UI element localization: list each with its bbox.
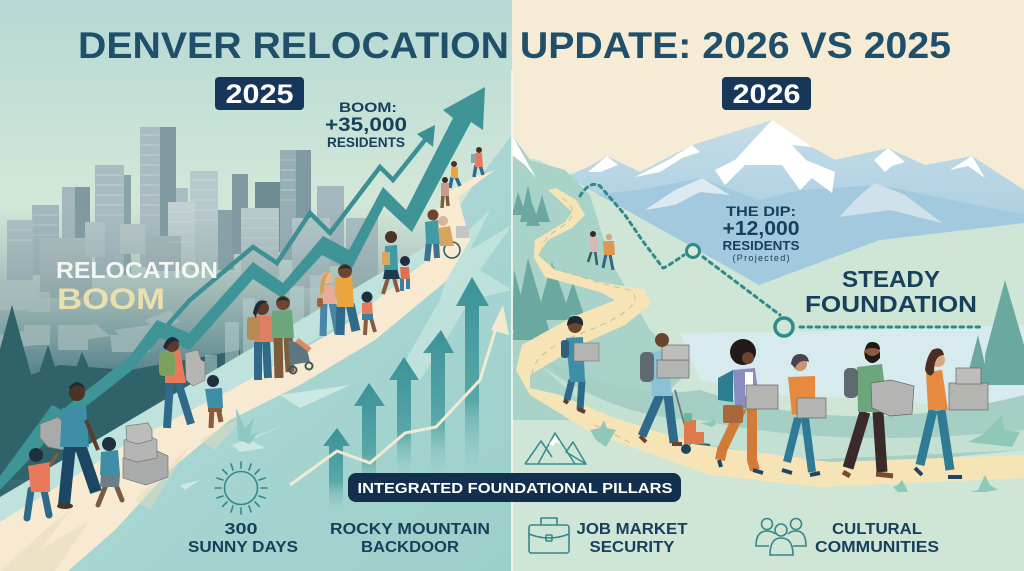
foreground pine trees — [0, 305, 240, 480]
year badge 2025: 2025 — [226, 79, 294, 109]
callout: the dip residents — [722, 203, 800, 263]
man in green — [272, 296, 294, 378]
orange child — [27, 448, 58, 518]
mountain slope — [0, 135, 512, 571]
headline: relocation boom: RELOCATION — [56, 257, 218, 283]
callout: the dip residents: RESIDENTS — [722, 238, 800, 253]
meadow in front of road — [540, 365, 1024, 460]
icon: small mountains — [525, 433, 586, 464]
stacked boxes — [185, 350, 205, 386]
family: blonde woman, man in orange, child — [317, 264, 375, 336]
callout: boom residents: BOOM: — [339, 99, 397, 115]
cream trend line — [290, 325, 497, 485]
woman with backpack — [382, 231, 400, 294]
year badge 2026 — [722, 77, 811, 110]
walker 6 woman in orange with boxes — [915, 348, 988, 477]
far hikers on hilltop — [441, 147, 483, 208]
callout: the dip residents: THE DIP: — [726, 203, 796, 219]
right background — [512, 0, 1024, 571]
man — [425, 210, 440, 261]
label: COMMUNITIES — [815, 539, 939, 556]
walker 1 with box — [561, 316, 599, 412]
lake — [680, 325, 1024, 420]
year badge 2025 — [215, 77, 304, 110]
man — [603, 234, 615, 270]
slope highlight shards — [180, 385, 350, 490]
cream arrow head — [491, 305, 509, 335]
valley meadow — [512, 155, 1024, 571]
walker 2 with hand truck — [640, 333, 710, 454]
label: CULTURAL — [832, 521, 922, 538]
hiker in pink — [441, 177, 449, 208]
callout: boom residents — [325, 99, 407, 150]
pillar: rocky mountain backdoor — [330, 521, 490, 556]
walker 3 in purple jacket — [718, 339, 778, 473]
label: SECURITY — [590, 539, 675, 556]
label: SUNNY DAYS — [188, 539, 298, 556]
callout: the dip residents: +12,000 — [722, 218, 800, 240]
pillar: 300 sunny days — [188, 462, 298, 556]
label — [576, 521, 688, 556]
right foreground pines — [965, 280, 1024, 385]
blue child — [98, 437, 122, 505]
big rising trend arrow — [0, 87, 485, 490]
man pushing wheelchair — [425, 210, 469, 261]
stacked boxes — [123, 423, 168, 485]
thin rising trend arrow — [132, 125, 435, 365]
child in red — [400, 256, 410, 291]
hiker with orange backpack — [471, 147, 483, 177]
woman with green backpack — [159, 337, 191, 428]
left background — [0, 0, 512, 571]
label — [188, 521, 298, 556]
rising vertical arrows — [323, 277, 489, 515]
slope facets — [400, 210, 512, 380]
translucent bar silhouettes — [205, 275, 324, 385]
woman in teal with child — [382, 231, 410, 294]
headline: steady foundation: FOUNDATION — [805, 291, 977, 317]
section banner: integrated foundational pillars — [348, 473, 681, 502]
road centre dashes — [532, 198, 635, 445]
foreground roofs — [0, 283, 180, 352]
stroller — [288, 340, 312, 374]
label: JOB MARKET — [576, 521, 688, 538]
father — [57, 382, 98, 509]
foreground grass tufts — [590, 415, 1020, 492]
child in red — [362, 292, 375, 335]
icon: sun — [215, 462, 267, 514]
walker 5 bearded man with large box — [843, 342, 914, 476]
snow caps — [588, 120, 985, 193]
winding road — [516, 188, 1024, 487]
man in orange shirt — [335, 264, 356, 335]
icon: community group — [756, 518, 806, 555]
couple with stroller — [247, 296, 312, 380]
panel: 2025 relocation boom — [0, 0, 512, 571]
callout: the dip residents: (Projected) — [732, 253, 790, 263]
family: woman with boxes and child — [159, 337, 223, 428]
teal strip beside path — [0, 244, 452, 525]
pillar: rocky mountain backdoor: BACKDOOR — [361, 539, 459, 556]
marker ring, dip — [686, 244, 700, 258]
marker ring, steady — [775, 318, 793, 336]
walker 4 with glasses — [782, 354, 826, 475]
year badge 2026: 2026 — [732, 79, 800, 109]
path shadows — [0, 415, 245, 571]
title: DENVER RELOCATION UPDATE: 2026 VS 2025 — [78, 25, 951, 66]
green foreground hills — [545, 360, 1024, 470]
centre divider — [511, 70, 513, 571]
moving boxes held by father — [40, 417, 64, 450]
far couple on the road — [588, 231, 615, 270]
city skyline — [0, 127, 430, 505]
pillar: cultural communities — [756, 518, 939, 556]
child in blue shirt — [205, 375, 223, 428]
wheelchair with passenger — [438, 216, 469, 258]
headline: relocation boom — [56, 257, 218, 316]
family: child, father, child, boxes — [27, 382, 168, 518]
small plant — [236, 408, 258, 444]
dotted trend line: the dip — [580, 184, 980, 327]
hiker in yellow — [450, 161, 460, 188]
icon: briefcase — [529, 518, 569, 553]
section banner: integrated foundational pillars: INTEGRATED FOUNDATIONAL PILLARS — [358, 480, 672, 497]
lower ridges — [645, 178, 730, 210]
callout: boom residents: +35,000 — [325, 115, 407, 136]
pillar: rocky mountain backdoor: ROCKY MOUNTAIN — [330, 521, 490, 538]
woman — [588, 231, 598, 265]
lower city and forest shading — [0, 205, 430, 505]
cream hillside path — [0, 170, 495, 571]
pillar: job market security — [529, 518, 688, 556]
headline: steady foundation — [805, 266, 977, 317]
woman with backpack — [247, 300, 274, 380]
panel: 2026 steady foundation — [512, 0, 1024, 571]
snowy mountain range — [562, 120, 1024, 290]
thin arrow head — [417, 125, 435, 147]
headline: relocation boom: BOOM — [57, 283, 165, 316]
label: 300 — [224, 521, 258, 538]
building window stripes — [8, 135, 295, 248]
left green hill — [512, 135, 690, 420]
headline: steady foundation: STEADY — [842, 266, 940, 292]
callout: boom residents: RESIDENTS — [327, 135, 405, 150]
label — [815, 521, 939, 556]
blonde woman — [317, 272, 338, 336]
pine trees on the left hill — [512, 185, 584, 340]
snow on left peak — [512, 135, 536, 178]
